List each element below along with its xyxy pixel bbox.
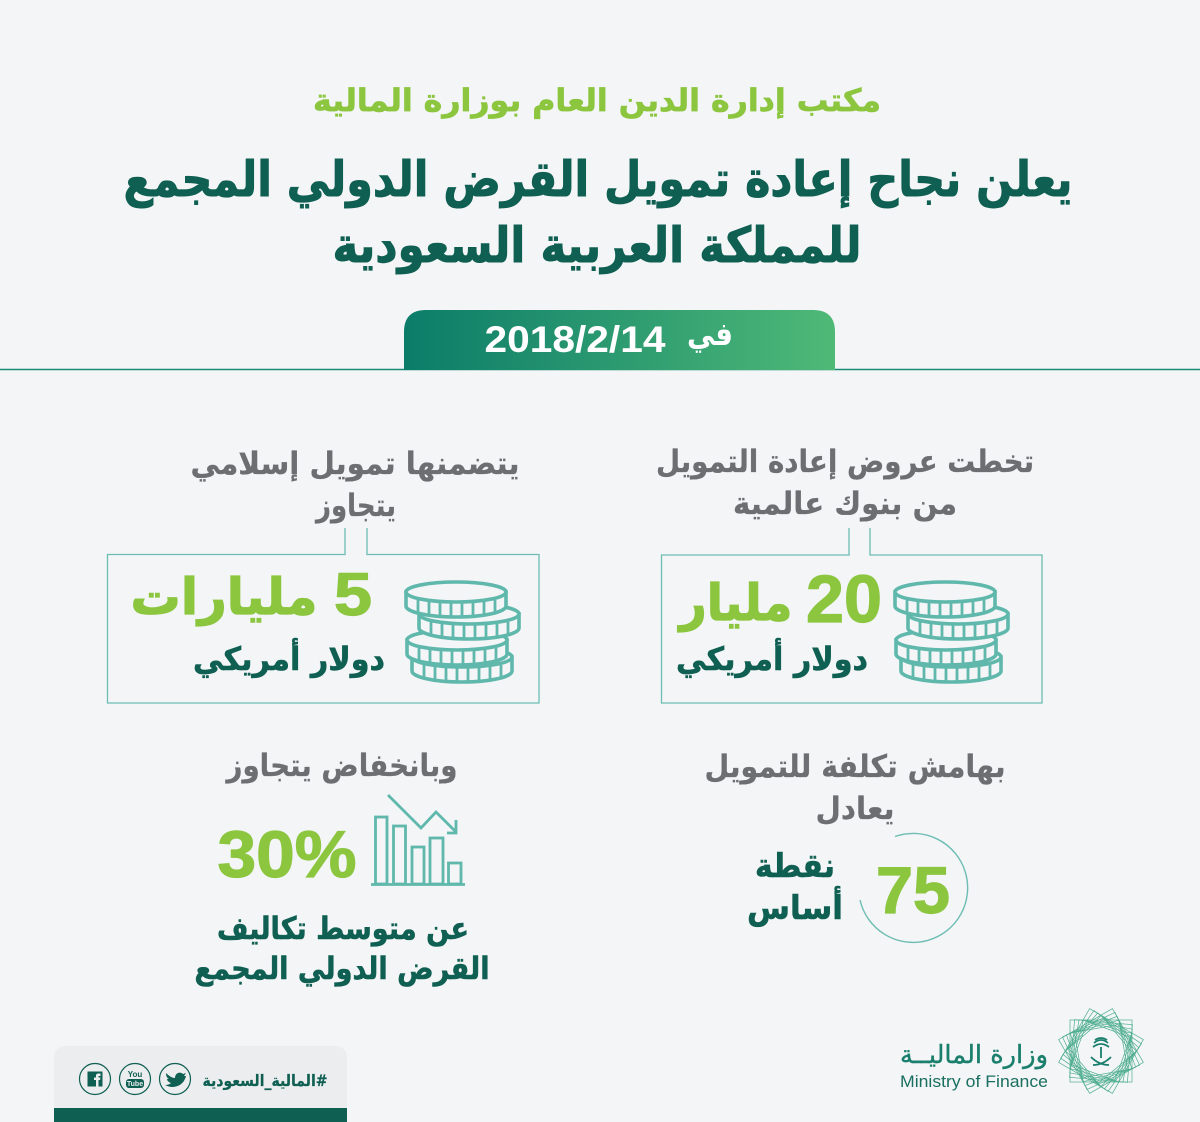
- text: margin cost: يعادل: [816, 791, 894, 827]
- panel: 20 billion: مليار: [677, 574, 792, 632]
- header subtitle: مكتب إدارة الدين العام بوزارة المالية: [313, 83, 881, 119]
- main title: يعلن نجاح إعادة تمويل القرض الدولي المجمع: [124, 151, 1072, 209]
- panel: 20 billion: دولار أمريكي: [676, 638, 868, 678]
- social bar: [54, 1046, 347, 1122]
- hashtag: #المالية_السعودية: [202, 1071, 328, 1090]
- text: islamic tranche: يتجاوز: [314, 488, 396, 524]
- date tab: في: [687, 315, 733, 353]
- date tab: 2018/2/14: [484, 319, 666, 360]
- icon: twitter: [160, 1064, 190, 1094]
- icon: coins: [406, 582, 519, 682]
- logo: Ministry of Finance: وزارة الماليــة: [900, 1040, 1048, 1070]
- icon: youtube: [120, 1064, 150, 1094]
- emblem: [1059, 1009, 1143, 1093]
- panel: 5 billion: مليارات: [130, 568, 318, 626]
- logo: Ministry of Finance: [900, 1009, 1143, 1093]
- stat: 75 basis points: [747, 833, 968, 942]
- text: below average cost: القرض الدولي المجمع: [194, 951, 490, 987]
- stat: 75 basis points: نقطة: [755, 846, 835, 885]
- text: decrease exceeding: وبانخفاض يتجاوز: [225, 748, 458, 784]
- logo: Ministry of Finance: Ministry of Finance: [900, 1073, 1048, 1091]
- text: islamic tranche: يتضمنها تمويل إسلامي: [190, 446, 520, 482]
- stat: 75 basis points: 75: [876, 853, 950, 927]
- stat: 30 percent: 30%: [218, 817, 356, 891]
- main title: للمملكة العربية السعودية: [332, 217, 862, 274]
- stat: 75 basis points: أساس: [747, 886, 843, 927]
- palm and swords: [1091, 1038, 1111, 1065]
- text: bids from global banks: تخطت عروض إعادة التمويل: [656, 444, 1034, 480]
- text: bids from global banks: من بنوك عالمية: [733, 486, 957, 522]
- panel: 20 billion: [662, 528, 1042, 703]
- icon: coins: [895, 582, 1008, 682]
- panel: 20 billion: 20: [806, 562, 882, 637]
- text: bids from global banks: [656, 444, 1034, 522]
- icon: youtube: Tube: [127, 1081, 143, 1088]
- main title: [124, 151, 1072, 274]
- text: below average cost: [194, 911, 490, 987]
- panel: 5 billion: دولار أمريكي: [193, 638, 385, 678]
- text: below average cost: عن متوسط تكاليف: [217, 911, 469, 947]
- date tab: [0, 310, 1200, 370]
- text: margin cost: بهامش تكلفة للتمويل: [704, 749, 1006, 785]
- icon: falling bar chart: [371, 795, 465, 884]
- icon: youtube: You: [128, 1070, 142, 1079]
- panel: 5 billion: [108, 528, 539, 703]
- icon: facebook: [80, 1064, 110, 1094]
- text: islamic tranche: [190, 446, 520, 524]
- text: margin cost: [704, 749, 1006, 827]
- panel: 5 billion: 5: [334, 561, 372, 628]
